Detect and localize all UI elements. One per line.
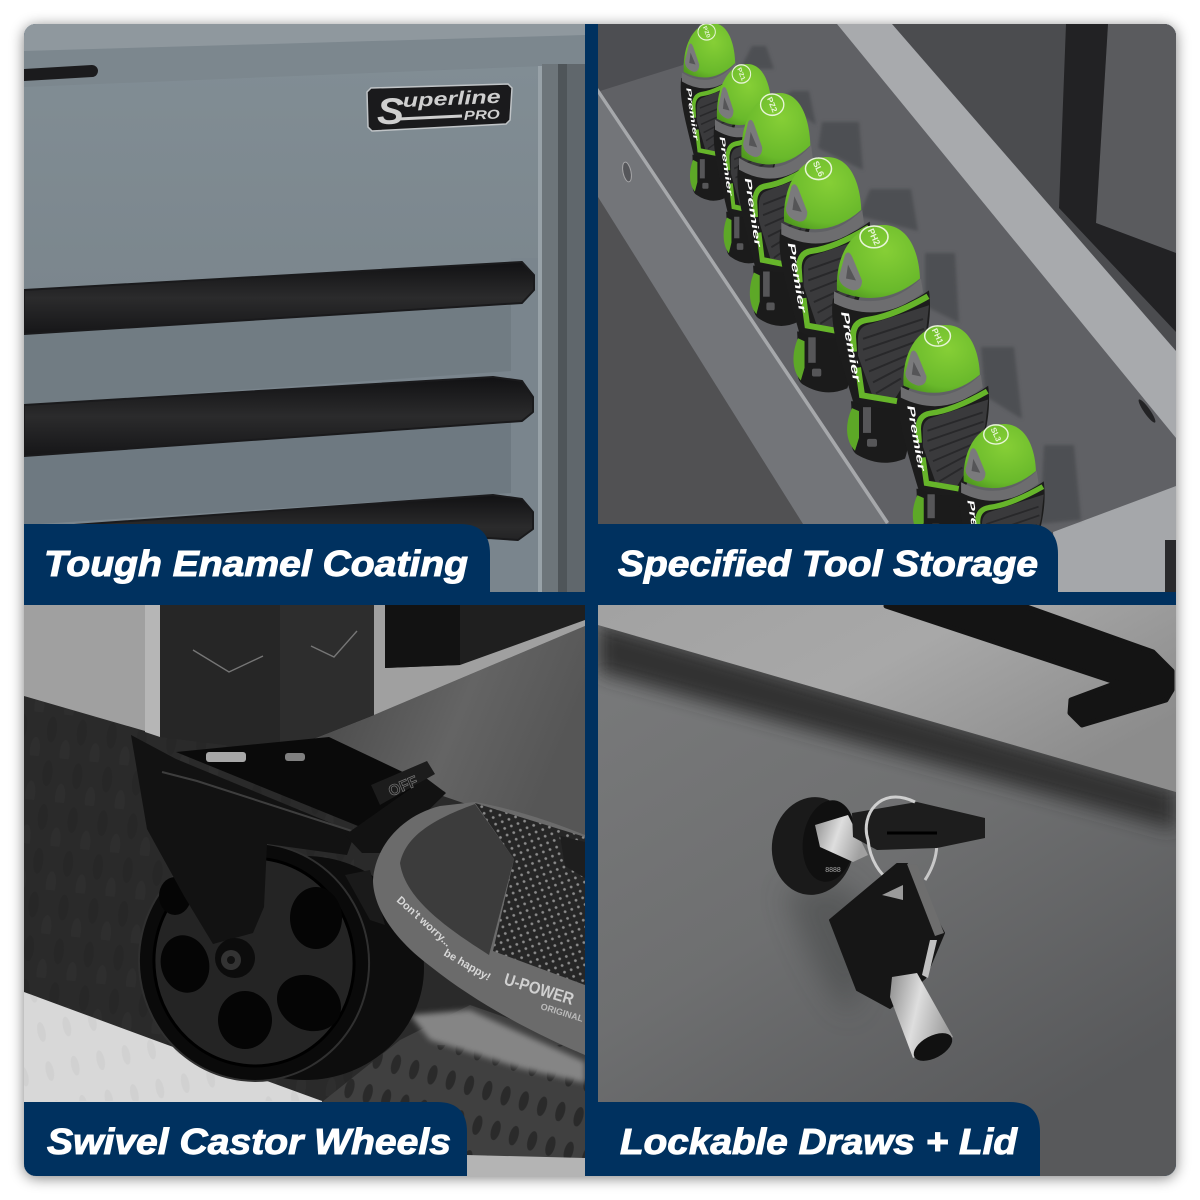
label: swivel castor wheels — [24, 1102, 467, 1176]
screwdriver 4: Premier — [785, 242, 808, 315]
swivel plate — [176, 737, 445, 829]
drawer handle 3 — [74, 494, 534, 541]
screwdriver 2 — [714, 64, 778, 263]
frame: vertical divider — [585, 24, 598, 1176]
drawer handle 2 — [24, 377, 533, 456]
panel: swivel castor wheels: OFF — [386, 773, 420, 800]
screwdriver 5 — [832, 225, 930, 463]
screwdriver 7: Premier — [964, 499, 986, 565]
screwdriver 7 — [961, 424, 1045, 526]
wheel — [140, 845, 424, 1082]
light floor — [24, 992, 330, 1176]
screwdriver 3: PZ2 — [765, 95, 779, 114]
axle nut — [215, 938, 255, 978]
screwdriver 1: Premier — [684, 87, 701, 143]
screwdriver 4 — [780, 157, 871, 392]
mount hole — [622, 162, 632, 182]
cabinet body grey — [24, 605, 145, 731]
shoe: U-POWER — [502, 970, 576, 1009]
key ring back arc — [925, 825, 937, 880]
lock cylinder — [766, 792, 868, 900]
hanging key — [830, 864, 957, 1067]
label: lockable draws and lid — [585, 1102, 1040, 1176]
lock shadow — [785, 880, 885, 1015]
label: lockable draws and lid: Lockable Draws + Lid — [620, 1121, 1018, 1162]
dark mat bottom right — [322, 1005, 585, 1158]
light rail — [837, 24, 1176, 438]
castor fork — [131, 735, 355, 944]
back wall window area — [1166, 24, 1176, 34]
shoe: ORIGINAL — [539, 1001, 585, 1024]
screwdriver 3: Premier — [742, 177, 763, 250]
logo badge: uperline — [402, 87, 502, 112]
shoe: be happy! — [441, 947, 492, 984]
bolts — [206, 752, 305, 762]
label: specified tool storage: Specified Tool Storage — [618, 543, 1038, 584]
floor mat left — [24, 695, 354, 1115]
panel: lockable draws and lid — [598, 605, 1176, 1176]
panel: tough enamel coating — [24, 24, 585, 592]
label: tough enamel coating — [24, 524, 490, 592]
logo badge — [367, 84, 512, 132]
panel: specified tool storage — [598, 23, 1176, 633]
label: swivel castor wheels: Swivel Castor Wheels — [47, 1121, 451, 1162]
inserted key head — [852, 802, 985, 850]
top-left handle — [24, 71, 92, 75]
screwdriver 1: PZ0 — [701, 25, 711, 40]
screwdriver 1 — [681, 23, 741, 201]
logo badge: PRO — [463, 106, 500, 123]
frame: horizontal divider — [24, 592, 1176, 605]
storage box — [385, 605, 585, 668]
screwdriver 6 — [900, 325, 990, 524]
lid handle — [886, 606, 1172, 725]
brake pedal — [345, 778, 446, 853]
panel: swivel castor wheels — [24, 605, 585, 1176]
screwdriver 2: Premier — [718, 136, 734, 198]
screwdriver 5: PH2 — [866, 227, 882, 247]
lid — [598, 605, 1176, 792]
key ring front arc — [866, 797, 915, 882]
label: specified tool storage — [585, 524, 1058, 592]
tray side wall — [598, 90, 889, 524]
screwdriver 6: Premier — [904, 405, 927, 474]
screwdriver 3 — [737, 93, 819, 326]
shoe: Don't worry... — [394, 894, 453, 949]
screwdriver 2: PZ1 — [736, 66, 746, 82]
screwdriver 5: Premier — [838, 311, 863, 384]
back wall — [315, 626, 585, 835]
brake bracket — [345, 870, 385, 925]
shoe — [373, 802, 585, 1055]
label: tough enamel coating: Tough Enamel Coating — [44, 543, 468, 584]
shadow under lid — [598, 622, 1176, 830]
black corner leg — [192, 630, 374, 738]
tray floor — [600, 24, 1176, 532]
tray front lip — [1053, 486, 1176, 592]
screwdriver 7: SL3 — [989, 426, 1003, 443]
tool shadows — [740, 46, 1081, 524]
logo badge: S — [377, 91, 404, 132]
lock cylinder: 8888 — [825, 867, 841, 874]
carpet liner — [598, 197, 803, 592]
screwdriver 4: SL6 — [811, 159, 826, 178]
screwdriver 6: PH1 — [930, 327, 945, 346]
drawer handle 1 — [24, 262, 534, 334]
